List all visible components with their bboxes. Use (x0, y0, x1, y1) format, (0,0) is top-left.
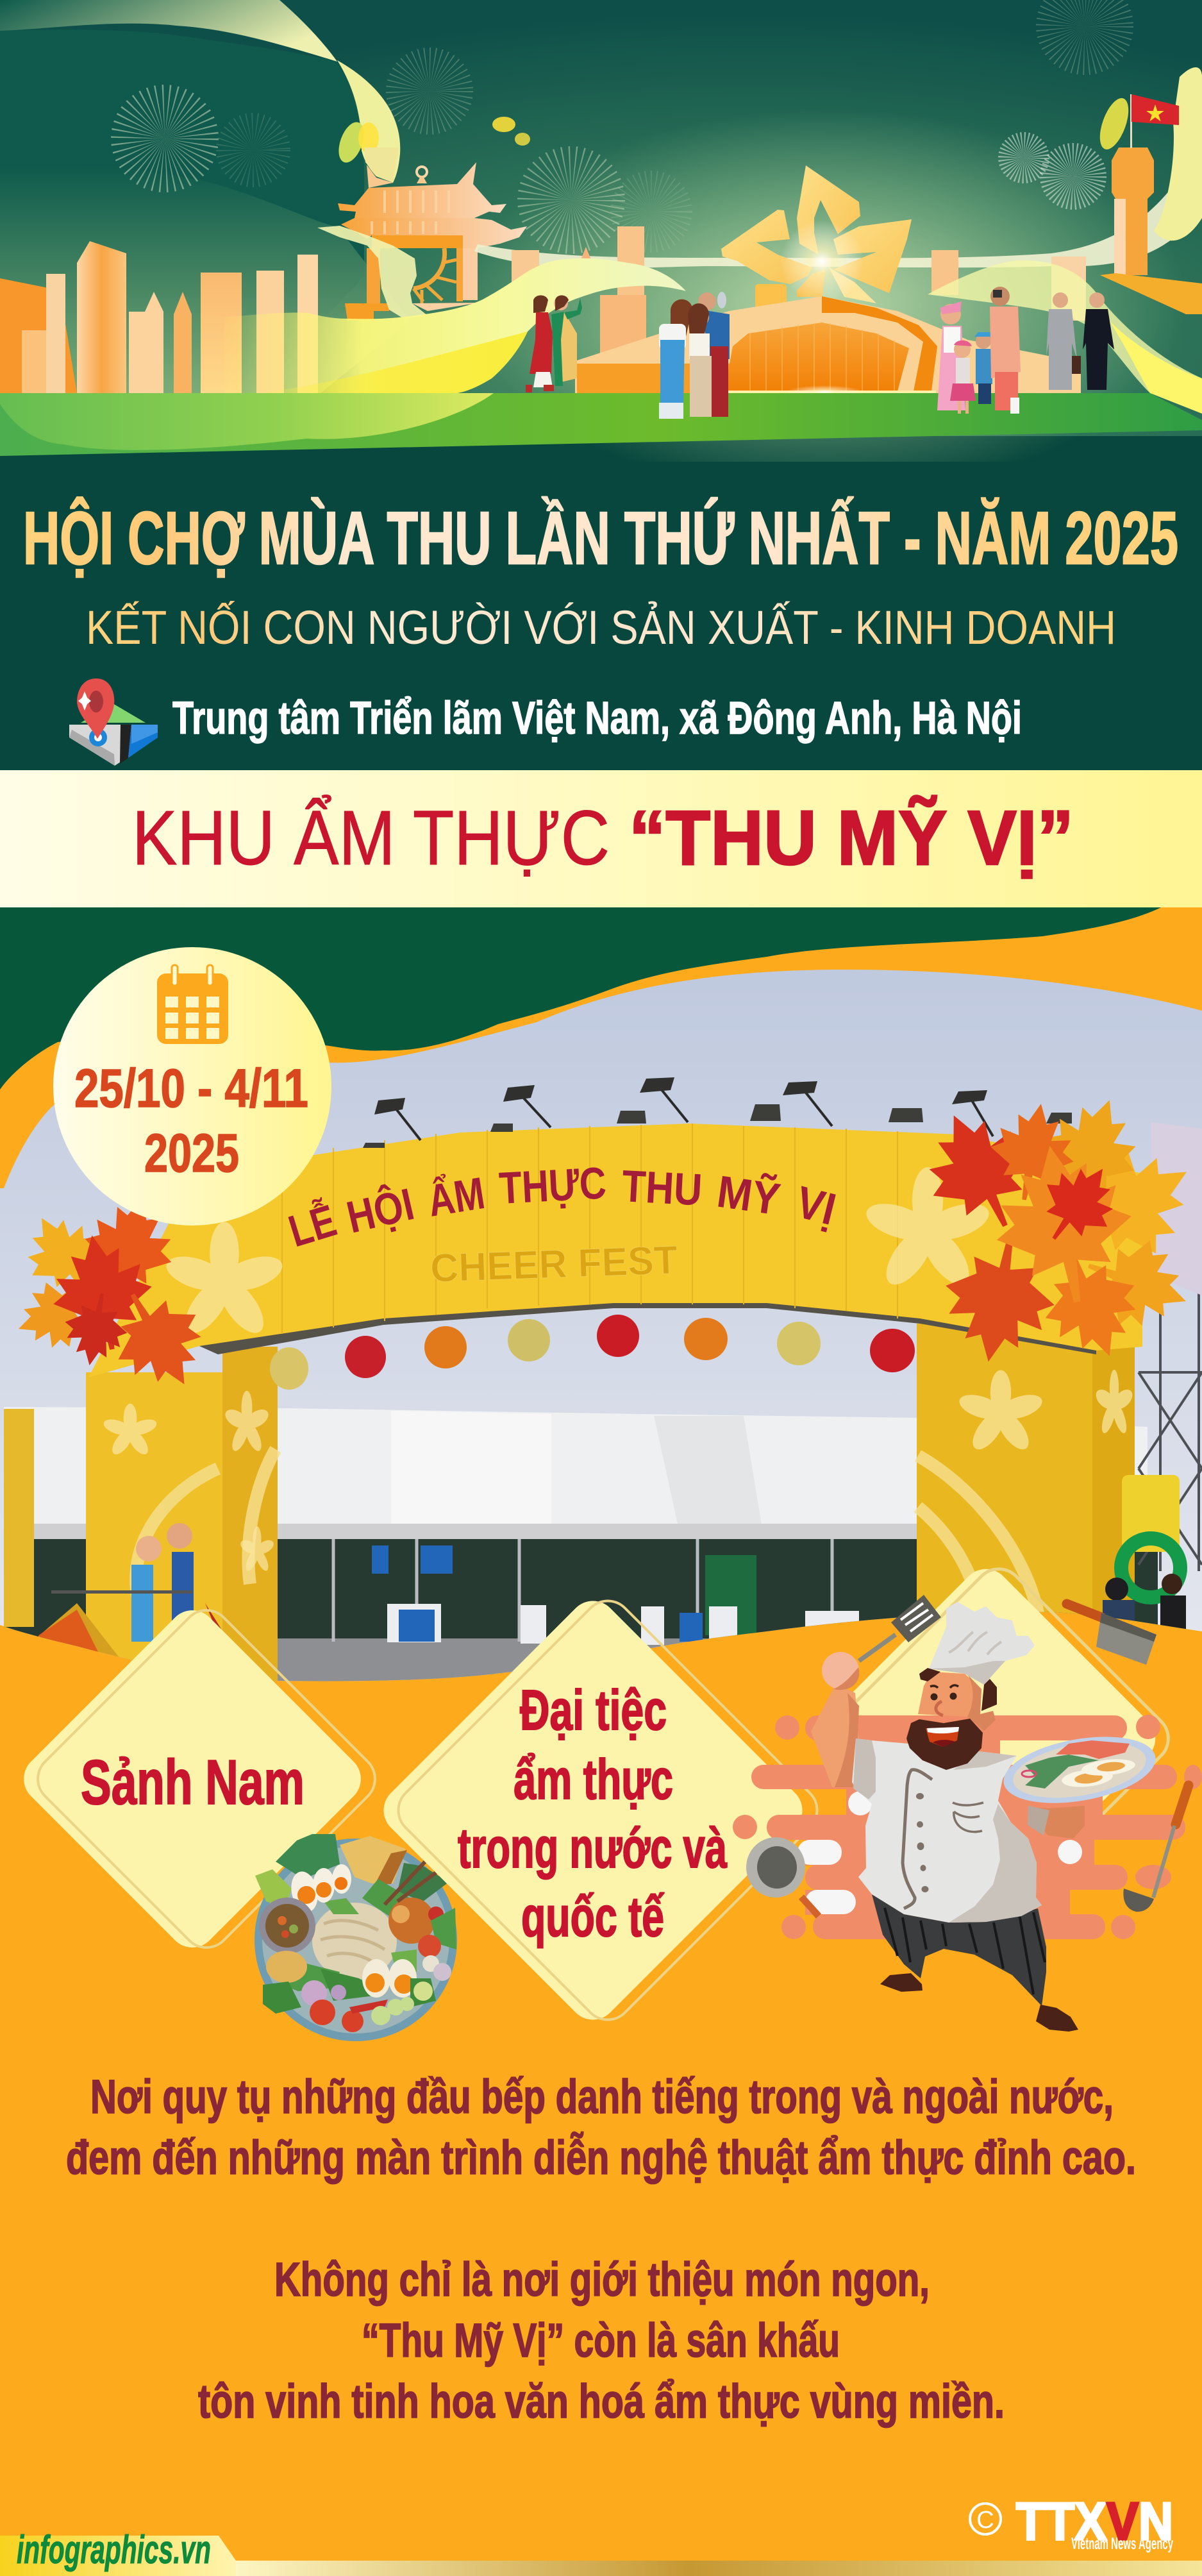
diamond: behind chef (806, 1559, 1178, 1918)
chef raised arm (811, 1652, 859, 1787)
wave on ground (0, 393, 494, 450)
monument tower with flag: ★ (1145, 100, 1165, 126)
line 2: “Thu Mỹ Vị” còn là sân khấu (362, 2314, 840, 2367)
chef jacket (852, 1738, 1042, 1923)
yellow wave ribbon left (224, 258, 686, 393)
lanterns (270, 1315, 915, 1390)
heading: food zone: KHU ẨM THỰC (132, 794, 610, 881)
family group (937, 287, 1021, 414)
paragraph 1 (66, 2070, 1136, 2184)
label line 2: ẩm thực (513, 1747, 673, 1811)
chef head (918, 1668, 997, 1731)
tent (4, 1407, 1148, 1533)
gate sign text: ẨM (424, 1167, 488, 1226)
icon: map pin (69, 678, 158, 766)
label: Sanh Nam: Sảnh Nam (81, 1747, 305, 1817)
gate sign text: THU (621, 1161, 703, 1215)
mid buildings (617, 226, 644, 295)
chef illustration (811, 1595, 1161, 2032)
stage equipment (387, 1604, 859, 1645)
date badge (53, 947, 331, 1225)
cream arc band (474, 74, 1202, 269)
gate sign text (283, 1158, 840, 1256)
logo: TTXVN: TTXVN (1016, 2491, 1173, 2551)
standee and stalls left (32, 1523, 256, 1680)
yellow wave ribbon right (928, 260, 1202, 394)
diamond: Dai tiec am thuc (374, 1591, 827, 2030)
orange wave (0, 907, 1202, 2576)
date text: 25/10 - 4/11 (74, 1058, 308, 1118)
gate sign subtitle: CHEER FEST (430, 1238, 678, 1291)
lotus monument (721, 165, 912, 310)
chef shoes (880, 1973, 922, 1992)
autumn leaves right (906, 1084, 1202, 1372)
arch pillars (86, 1372, 222, 1687)
left minor pillar (4, 1409, 34, 1627)
footer tab (0, 2528, 236, 2576)
wave lower bright edge (256, 332, 528, 393)
chef backdrop white pills (797, 1791, 1082, 1914)
ribbon top left (0, 0, 337, 62)
floodlights (363, 1077, 1072, 1148)
source label: infographics.vn (17, 2528, 211, 2572)
chef forearm and cuff (1028, 1806, 1085, 1839)
selfie trio (659, 292, 730, 419)
businessmen (1046, 292, 1114, 390)
label line 3: trong nước và (458, 1816, 728, 1880)
photo: festival gate (0, 962, 1202, 1690)
header dark panel (0, 0, 1202, 770)
gate sign text: LỄ (283, 1195, 342, 1256)
inflatable and performers right (1103, 1475, 1186, 1640)
chef plate (998, 1726, 1161, 1814)
line 1: Không chỉ là nơi giới thiệu món ngon, (274, 2253, 930, 2306)
chef pants (872, 1894, 1046, 2006)
logo: TTXVN: C (976, 2507, 994, 2534)
icon: cleaver (1067, 1604, 1156, 1665)
bright wave right (1109, 321, 1202, 414)
icon: calendar (157, 965, 228, 1044)
gate sign text: THỰC (498, 1158, 608, 1213)
banner illustration (0, 0, 1202, 494)
year text: 2025 (144, 1123, 239, 1183)
label line 4: quốc tế (521, 1885, 665, 1948)
heading band (0, 770, 1202, 907)
chef backdrop pills (733, 1715, 1202, 1939)
city skyline left (0, 241, 318, 393)
heading: Thu My Vi: “THU MỸ VỊ” (629, 794, 1074, 881)
green section background (0, 907, 1202, 1100)
dome hall (575, 296, 1081, 398)
gate sign text: MỸ (714, 1166, 783, 1224)
gate sign text: HỘI (342, 1178, 419, 1243)
ribbon fold at pagoda (317, 226, 428, 319)
flower motifs (102, 1167, 1133, 1574)
swirl decoration (136, 1449, 1039, 1616)
autumn leaves left (7, 1186, 223, 1406)
ground (0, 393, 1202, 456)
paragraph 2 (198, 2253, 1005, 2428)
icon: frying pan (746, 1837, 819, 1916)
icon: ladle (1123, 1785, 1189, 1912)
scaffold (1139, 1257, 1202, 1571)
monument tower with flag (1100, 94, 1202, 314)
pagoda (338, 147, 527, 321)
label line 1: Đại tiệc (520, 1678, 667, 1742)
footer strip (218, 2561, 1202, 2576)
arch beam (88, 1124, 1142, 1377)
chef hat (929, 1602, 1035, 1685)
diamond: Sanh Nam (13, 1600, 385, 1958)
couple in ao dai (526, 295, 582, 392)
gate sign text: VỊ (791, 1177, 840, 1234)
chef beard and mouth (906, 1719, 983, 1770)
fireworks (138, 2, 1109, 232)
ribbon descending (337, 60, 400, 183)
chef spatula (859, 1595, 941, 1661)
icon: food bowl (255, 1834, 457, 2041)
